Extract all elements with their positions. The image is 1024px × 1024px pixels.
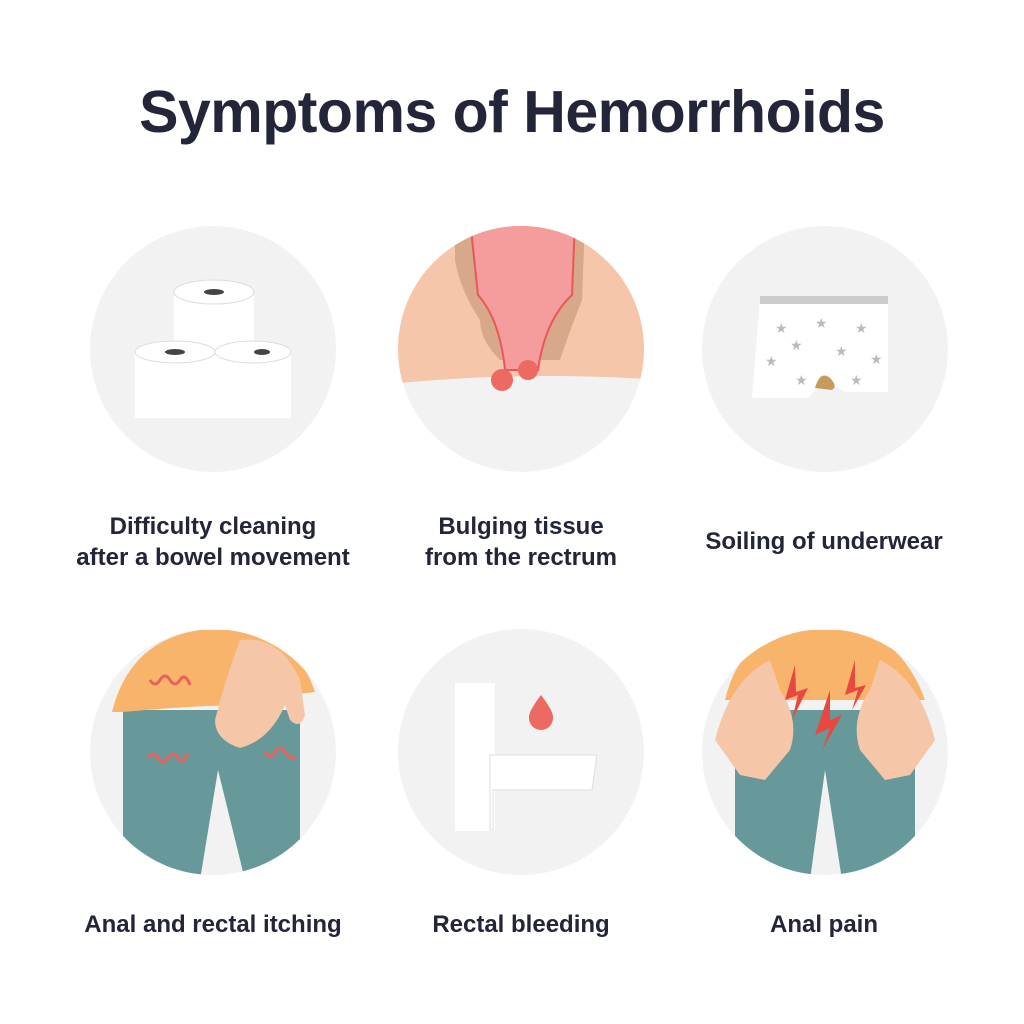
- icon: toilet paper: [90, 226, 336, 472]
- icon: underwear: ★: [795, 372, 808, 388]
- label: soiling: Soiling of underwear: [705, 528, 943, 555]
- label: bulging tissue: [425, 513, 617, 571]
- icon: anal pain: [702, 629, 948, 880]
- icon: itching: [90, 629, 336, 880]
- label: bleeding: Rectal bleeding: [432, 911, 610, 938]
- icon: underwear: ★: [835, 343, 848, 359]
- title: Symptoms of Hemorrhoids: [139, 79, 885, 145]
- label: bulging tissue: from the rectrum: [425, 544, 617, 571]
- label: difficulty cleaning: after a bowel movement: [76, 544, 350, 571]
- icon: underwear: ★: [850, 372, 863, 388]
- icon: bulging tissue: [398, 226, 644, 472]
- icon: underwear: ★: [775, 320, 788, 336]
- icon: underwear: ★: [815, 315, 828, 331]
- label: difficulty cleaning: Difficulty cleaning: [110, 513, 316, 540]
- label: difficulty cleaning: [76, 513, 350, 571]
- icon: underwear: [702, 226, 948, 472]
- icon: underwear: ★: [790, 337, 803, 353]
- icon: underwear: ★: [870, 351, 883, 367]
- label: itching: Anal and rectal itching: [84, 911, 342, 938]
- label: pain: Anal pain: [770, 911, 878, 938]
- icon: toilet bleeding: [398, 629, 644, 875]
- icon: underwear: ★: [855, 320, 868, 336]
- label: bulging tissue: Bulging tissue: [438, 513, 604, 540]
- icon: underwear: ★: [765, 353, 778, 369]
